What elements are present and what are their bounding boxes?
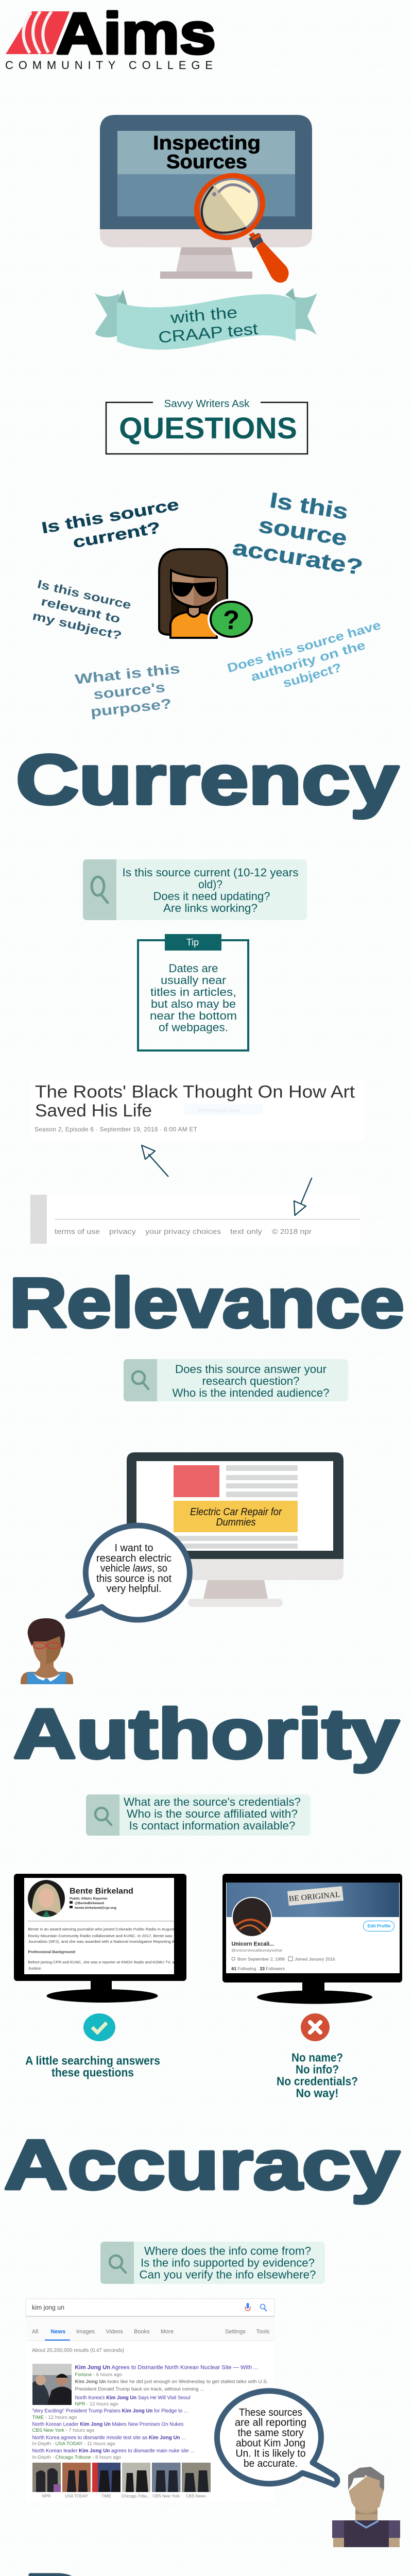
screenshot: Google news search results: Kim Jong Un Agrees to Dismantle North Korean Nuclear Site — With ...	[75, 2365, 258, 2371]
screenshot: Google news search results: North Korean leader Kim Jong Un agrees to dismantle main nuke site ...	[32, 2448, 195, 2454]
screenshot: Google news search results: NPR - 12 hours ago	[75, 2401, 118, 2407]
panel: relevance questions: Does this source answer your	[175, 1363, 327, 1376]
screenshot: Google news search results: Fortune - 6 hours ago	[75, 2372, 122, 2378]
panel: currency questions: Does it need updating?	[153, 890, 270, 903]
title text: Inspecting	[153, 132, 261, 154]
screenshot: NPR footer: terms of use	[55, 1227, 100, 1235]
screenshot: Google news search results: Settings	[225, 2329, 246, 2335]
speech bubble: electric vehicle laws: vehicle laws, so	[100, 1563, 167, 1574]
question: authority: authority on the	[249, 638, 367, 684]
icon: check mark	[83, 2013, 115, 2041]
arrow: down to page footer date	[294, 1178, 312, 1215]
screenshot: Google news search results: North Korea agrees to dismantle missile test site as Kim Jong Un ...	[32, 2435, 185, 2441]
monitor: anonymous twitter profile: 23 Followers	[260, 1966, 285, 1971]
heading: Relevance: Relevance	[9, 1263, 404, 1342]
monitor: Bente Birkeland profile: bente.birkeland@cpr.org	[75, 1906, 116, 1910]
question: authority	[226, 618, 391, 704]
panel: relevance questions: research question?	[202, 1375, 300, 1387]
panel: authority questions: Is contact information available?	[129, 1819, 296, 1832]
monitor: anonymous twitter profile: @unicornexcalibursayswhat	[232, 1948, 282, 1953]
monitor: anonymous twitter profile: 61 Following	[232, 1966, 256, 1971]
panel: currency questions: Is this source current (10-12 years	[123, 866, 299, 879]
text: no name no info: No way!	[296, 2087, 339, 2100]
icon: cross mark	[301, 2013, 330, 2041]
logo: Aims Community College: COMMUNITY COLLEGE	[5, 59, 213, 72]
monitor: Bente Birkeland profile: Rocky Mountain Community Radio collaborative and KUNC. In 2017, Bente was	[28, 1934, 173, 1938]
panel: tip: usually near	[161, 974, 226, 987]
monitor: Bente Birkeland profile: Before joining CPR and KUNC, she was a reporter at KMOX Radio and KOMU TV, a	[28, 1960, 175, 1964]
screenshot: Google news search results: USA TODAY	[65, 2494, 89, 2499]
question: current	[40, 495, 184, 556]
text: a little searching: these questions	[52, 2066, 134, 2079]
panel: accuracy questions: Can you verify the info elsewhere?	[139, 2268, 316, 2281]
panel: tip: Tip	[186, 937, 199, 947]
icon: search	[92, 877, 108, 903]
speech bubble: electric vehicle laws: very helpful.	[106, 1583, 162, 1595]
photo: lead story	[32, 2364, 72, 2405]
speech bubble: sources reporting same story: Un. It is likely to	[236, 2448, 306, 2460]
speech bubble: electric vehicle laws: research electric	[96, 1553, 171, 1564]
panel: relevance questions	[124, 1359, 348, 1401]
screenshot: Google news search results: 'Very Exciting!' President Trump Praises Kim Jong Un for Pledge to ...	[32, 2408, 188, 2414]
screenshot: Google news search results: CBS New York - 7 hours ago	[32, 2428, 94, 2433]
screenshot: NPR footer: privacy	[109, 1227, 136, 1235]
heading box: Savvy Writers Ask QUESTIONS: QUESTIONS	[119, 412, 297, 445]
logo: Aims Community College	[5, 1, 216, 72]
arrow: up to article date	[142, 1145, 168, 1177]
screenshot: Google news search results	[26, 2299, 274, 2502]
speech bubble: sources reporting same story: These sources	[239, 2407, 302, 2418]
question: authority: Does this source have	[226, 618, 383, 675]
icon: person with sunglasses and question bubble	[159, 549, 255, 640]
screenshot: Google news search results: Books	[134, 2329, 150, 2335]
question: current: Is this source	[40, 495, 180, 537]
logo: Aims Community College: Aims	[56, 1, 216, 66]
screenshot: Google news search results: Chicago Tribu...	[122, 2494, 150, 2499]
panel: authority questions: Who is the source affiliated with?	[127, 1807, 298, 1820]
photo strip: news thumbnails	[32, 2463, 211, 2492]
question: purpose: source's	[93, 680, 166, 702]
screenshot: Google news search results: Images	[76, 2329, 95, 2335]
icon: magnifying glass	[194, 173, 288, 283]
panel: tip: near the bottom	[150, 1009, 237, 1022]
icon: search	[95, 1808, 111, 1825]
text: no name no info	[277, 2050, 358, 2100]
question: current: current?	[72, 518, 162, 551]
screenshot: Google news search results: More	[161, 2329, 174, 2335]
speech bubble: sources reporting same story: about Kim Jong	[236, 2438, 305, 2449]
panel: tip: but also may be	[151, 997, 236, 1010]
panel: tip: of webpages.	[159, 1021, 228, 1033]
monitor: anonymous twitter profile: Edit Profile	[368, 1924, 391, 1928]
screenshot: Google news search results: North Korea's Kim Jong Un Says He Will Visit Seoul	[75, 2395, 191, 2401]
panel: currency questions: Are links working?	[163, 902, 258, 914]
screenshot: NPR article title with date: Saved His Life	[35, 1101, 152, 1121]
question: authority: subject?	[281, 660, 343, 690]
speech bubble: sources reporting same story: are all reporting	[235, 2417, 306, 2429]
panel: accuracy questions: Is the info supported by evidence?	[141, 2257, 315, 2269]
icon: search	[132, 1371, 148, 1389]
screenshot: Google news search results: All	[32, 2329, 38, 2335]
icon: person with sunglasses and question bubble: ?	[223, 605, 239, 635]
screenshot: NPR article title with date: Rectangular Snip	[198, 1108, 241, 1113]
screenshot: NPR footer: your privacy choices	[145, 1227, 221, 1235]
screenshot: Google news search results: News	[50, 2329, 65, 2335]
screenshot: NPR article title with date: Season 2, Episode 6 · September 19, 2018 · 6:00 AM ET	[35, 1126, 198, 1133]
title text	[153, 132, 261, 173]
text: no name no info: No credentials?	[277, 2074, 358, 2088]
question: purpose	[74, 661, 184, 721]
screenshot: Google news search results: Videos	[106, 2329, 123, 2335]
screenshot: Google news search results: In-Depth - USA TODAY - 11 hours ago	[32, 2441, 115, 2447]
question: relevant: relevant to	[40, 595, 122, 625]
monitor: Bente Birkeland profile: Bente Birkeland	[70, 1887, 133, 1896]
panel: relevance questions: Who is the intended audience?	[172, 1386, 330, 1399]
screenshot: Google news search results: TIME	[101, 2494, 111, 2499]
monitor: Bente Birkeland profile: Professional Background:	[28, 1950, 76, 1954]
screenshot: Google news search results: About 20,200,000 results (0.47 seconds)	[32, 2348, 124, 2353]
panel: tip	[138, 934, 248, 1050]
heading: Currency: Currency	[16, 740, 399, 819]
screenshot: Google news search results: President Donald Trump back on track, without coming ...	[75, 2386, 204, 2392]
screenshot: NPR footer	[30, 1195, 360, 1244]
photo: journalist portrait	[28, 1880, 65, 1917]
panel: tip: titles in articles,	[150, 986, 236, 998]
monitor: anonymous twitter profile: BE ORIGINAL	[288, 1891, 340, 1903]
question: relevant: Is this source	[36, 577, 132, 612]
speech bubble: electric vehicle laws	[68, 1526, 190, 1620]
ribbon: with the CRAAP test: CRAAP test	[158, 320, 259, 346]
screenshot: Google news search results: TIME - 12 hours ago	[32, 2415, 77, 2420]
monitor: Bente Birkeland profile: Justice.	[28, 1966, 42, 1971]
question: accurate: accurate?	[231, 535, 365, 580]
text: no name no info: No name?	[291, 2050, 343, 2064]
screenshot: Google news search results: CBS News	[186, 2494, 206, 2499]
monitor: electric car repair page: Electric Car Repair for	[190, 1506, 282, 1518]
monitor with title Inspecting Sources	[100, 115, 312, 279]
question: purpose: purpose?	[90, 696, 173, 720]
monitor: anonymous twitter profile: Unicorn Excali...	[232, 1941, 274, 1947]
speech bubble: electric vehicle laws: I want to	[114, 1543, 153, 1554]
monitor: Bente Birkeland profile: Public Affairs Reporter	[70, 1897, 108, 1901]
panel: currency questions: old)?	[198, 878, 222, 891]
monitor: anonymous twitter profile: Joined January 2016	[295, 1957, 335, 1962]
question: accurate: Is this	[268, 488, 350, 524]
panel: currency questions	[83, 859, 307, 920]
question: accurate: source	[257, 513, 349, 550]
question: relevant	[29, 577, 132, 643]
panel: accuracy questions: Where does the info come from?	[144, 2244, 311, 2258]
screenshot: NPR article title with date	[31, 1080, 364, 1141]
question: accurate	[231, 483, 373, 580]
screenshot: NPR article title with date: The Roots' Black Thought On How Art	[35, 1082, 355, 1101]
screenshot: Google news search results: Tools	[256, 2329, 270, 2335]
monitor: anonymous twitter profile: Born September 2, 1999	[237, 1957, 285, 1962]
monitor: Bente Birkeland profile: @BenteBirkeland	[75, 1902, 104, 1905]
text: a little searching: A little searching answers	[25, 2054, 160, 2067]
screenshot: NPR footer: © 2018 npr	[272, 1227, 312, 1235]
panel: tip: Dates are	[169, 962, 218, 975]
icon: man with gray hair	[332, 2467, 400, 2547]
heading: Authority: Authority	[13, 1694, 399, 1773]
panel: authority questions	[86, 1794, 311, 1836]
heading: Accuracy: Accuracy	[4, 2126, 400, 2204]
monitor: electric car repair page: Dummies	[216, 1517, 255, 1528]
ribbon: with the CRAAP test	[95, 288, 317, 350]
screenshot: Google news search results: North Korean Leader Kim Jong Un Makes New Promises On Nukes	[32, 2421, 183, 2428]
icon: search	[110, 2256, 126, 2273]
speech bubble: sources reporting same story	[217, 2391, 337, 2485]
screenshot: Google news search results: Kim Jong Un looks like he did just enough on Wednesday to get stalled talks with U.S.	[75, 2379, 268, 2384]
screenshot: Google news search results: CBS New York	[152, 2494, 180, 2499]
text: a little searching	[25, 2054, 160, 2079]
monitor: electric car repair page	[127, 1452, 344, 1607]
ribbon: with the CRAAP test: with the	[169, 303, 238, 327]
heading box: Savvy Writers Ask QUESTIONS: Savvy Writers Ask	[164, 398, 250, 410]
monitor: Bente Birkeland profile: Bente is an award-winning journalist who joined Colorado Public Radio in August	[28, 1927, 174, 1931]
heading box: Savvy Writers Ask QUESTIONS	[106, 398, 307, 454]
icon: woman with red glasses	[21, 1618, 73, 1684]
screenshot: NPR footer: text only	[230, 1227, 262, 1235]
screenshot: Google news search results: In-Depth - Chicago Tribune - 8 hours ago	[32, 2454, 121, 2461]
monitor: anonymous twitter profile	[222, 1874, 402, 2004]
speech bubble: sources reporting same story: be accurate.	[244, 2458, 298, 2469]
screenshot: Google news search results: NPR	[42, 2494, 51, 2499]
panel: accuracy questions	[100, 2242, 325, 2284]
speech bubble: electric vehicle laws: this source is not	[96, 1573, 171, 1585]
monitor: Bente Birkeland profile: Journalists (SPJ), and she was awarded with a National Investigative Reporting A	[28, 1939, 175, 1944]
text: no name no info: No info?	[296, 2063, 339, 2076]
monitor: Bente Birkeland profile	[14, 1874, 186, 2003]
question: purpose: What is this	[74, 661, 181, 687]
panel: authority questions: What are the source's credentials?	[124, 1795, 301, 1808]
question: relevant: my subject?	[31, 609, 123, 642]
speech bubble: sources reporting same story: the same story	[238, 2428, 304, 2439]
title text: Sources	[166, 151, 247, 173]
screenshot: Google news search results: kim jong un	[32, 2303, 64, 2311]
